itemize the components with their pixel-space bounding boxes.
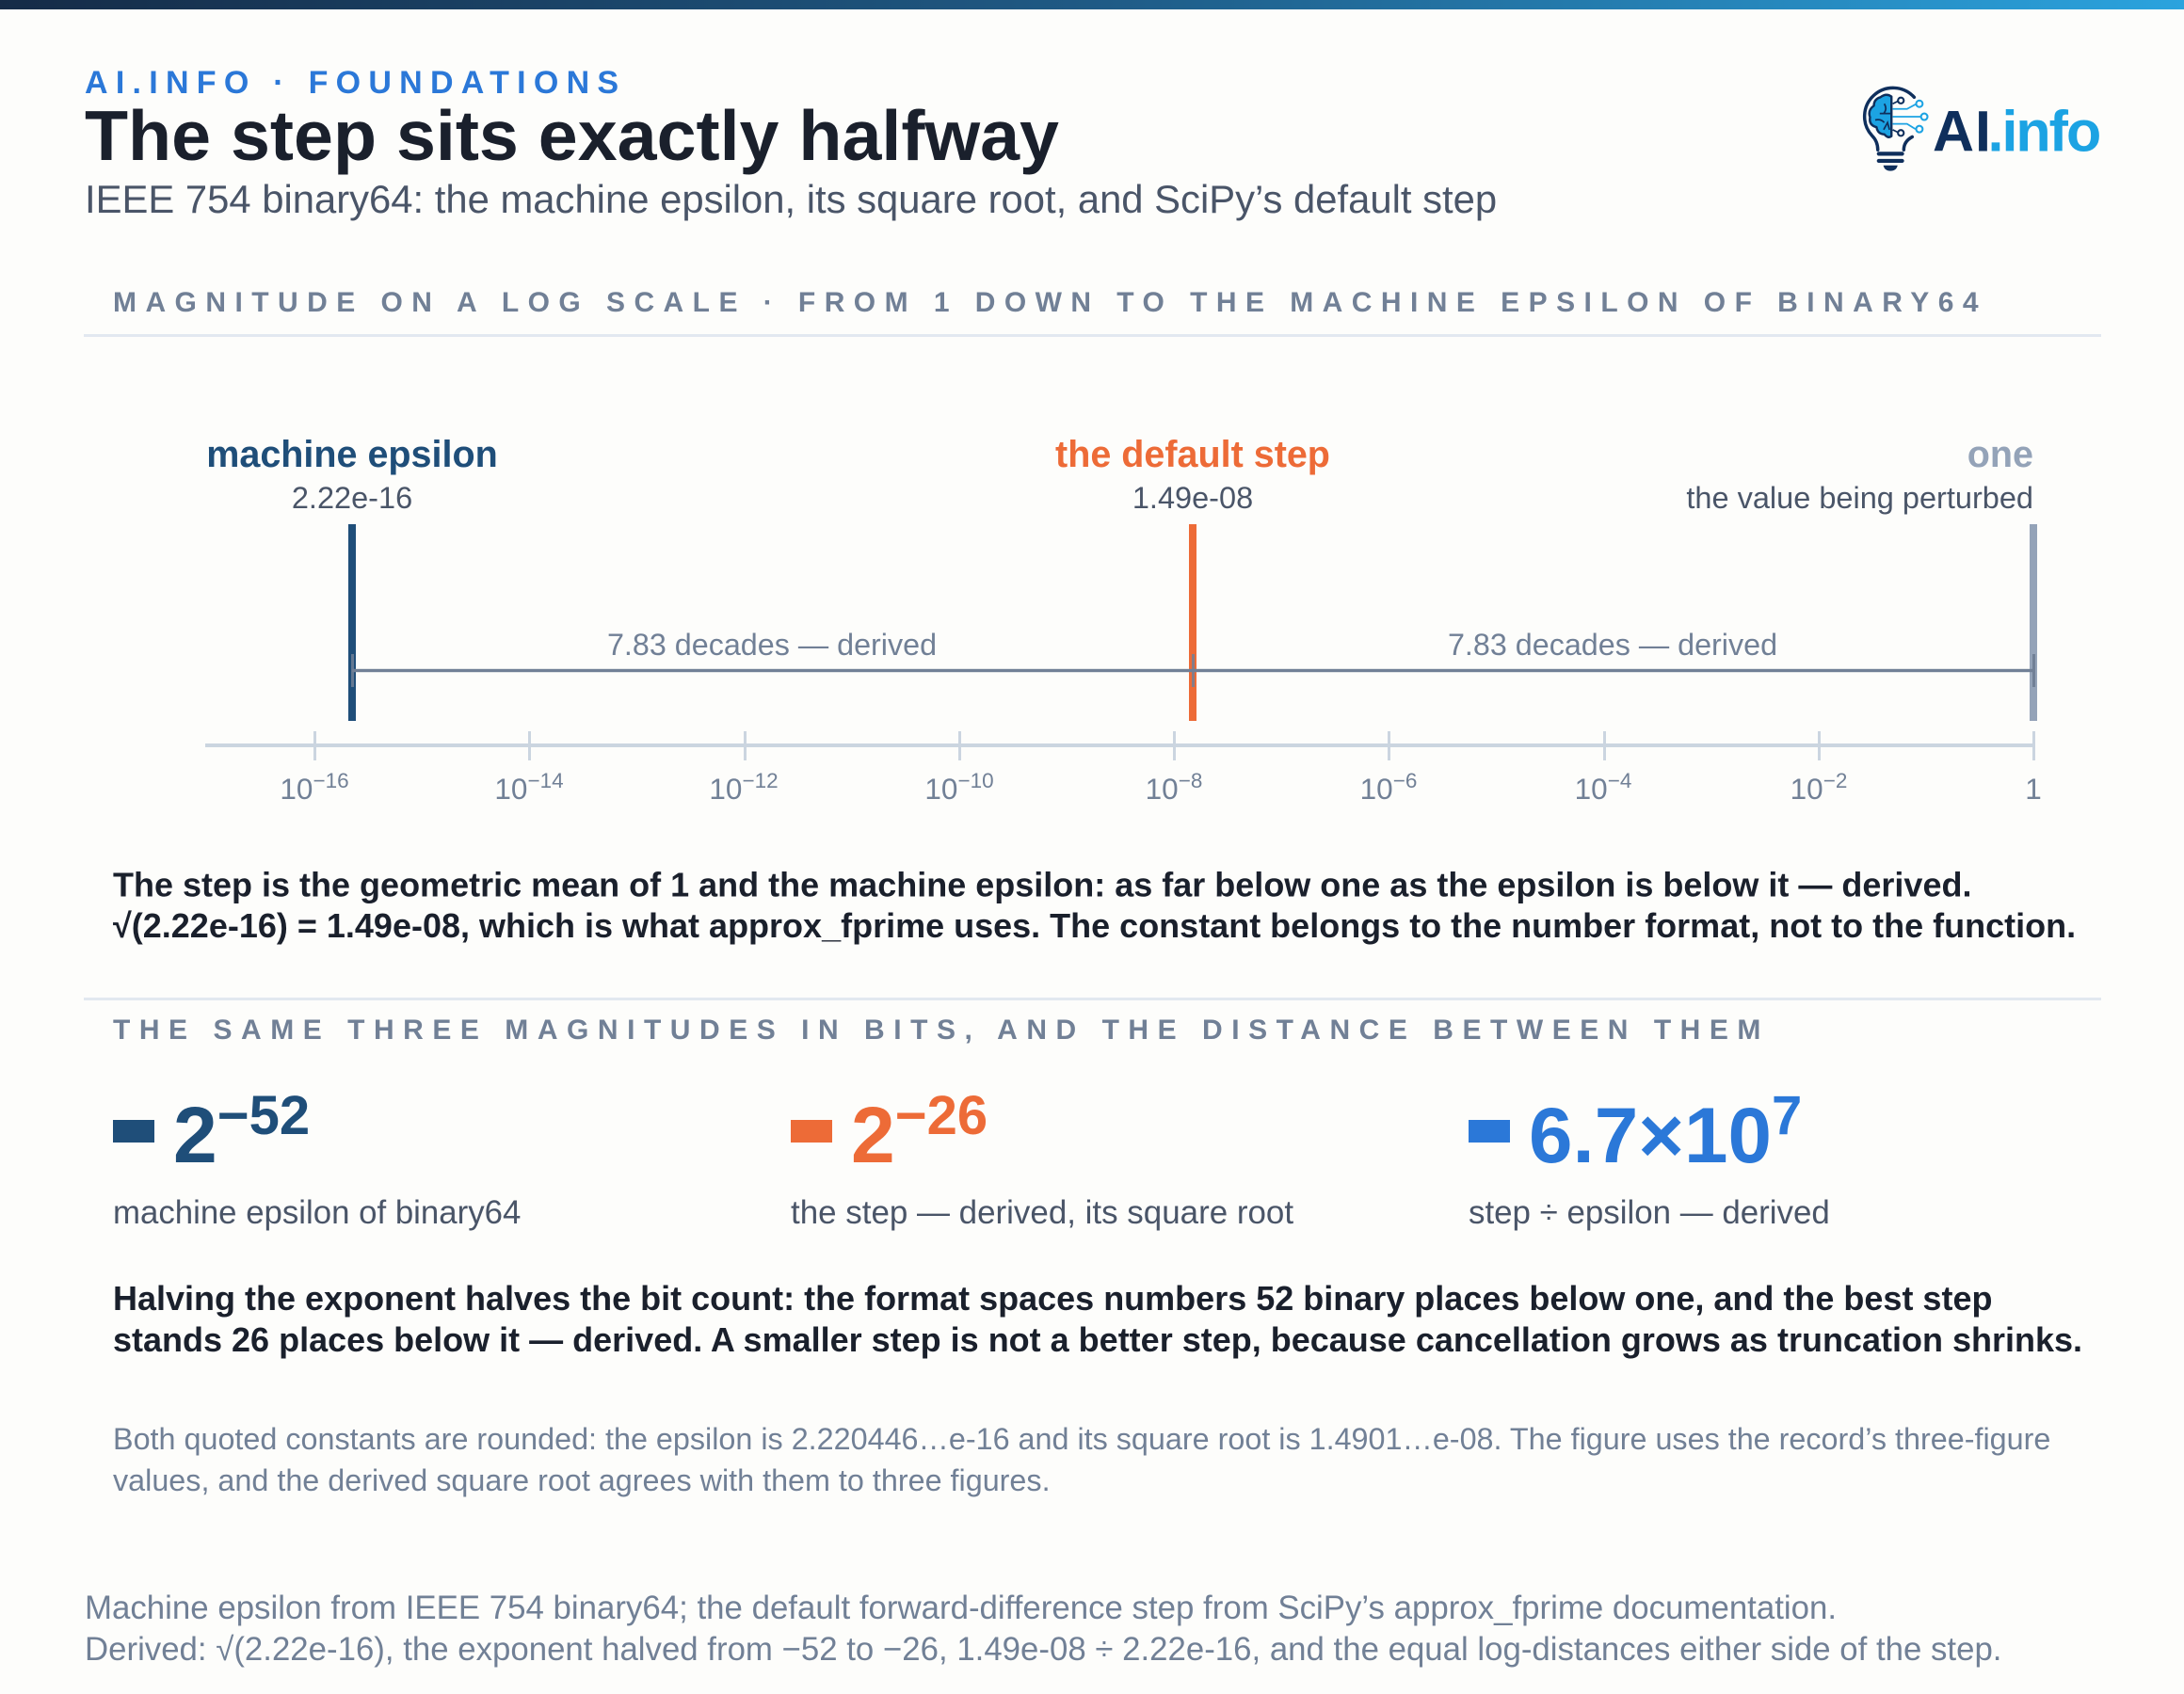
source footer: Derived: √(2.22e-16), the exponent halved from −52 to −26, 1.49e-08 ÷ 2.22e-16, and the equal log-distances either side of the step. [85,1631,2001,1668]
marker: the default step: the default step [1055,434,1330,475]
axis tick labels: −2 [1823,769,1847,792]
marker: the default step [1055,434,1330,721]
marker: one: the value being perturbed [1686,481,2033,515]
stat: epsilon exponent: machine epsilon of binary64 [113,1194,521,1231]
section heading: magnitude on a log scale: MAGNITUDE ON A LOG SCALE · FROM 1 DOWN TO THE MACHINE EPSILON OF BINARY64 [113,287,1987,318]
stat: ratio [1469,1085,1830,1231]
distance bracket: 7.83 decades — derived [607,628,937,662]
axis [205,731,2035,760]
section heading: bits: THE SAME THREE MAGNITUDES IN BITS, AND THE DISTANCE BETWEEN THEM [113,1015,1770,1046]
top gradient bar [0,0,2184,9]
takeaway paragraph one: The step is the geometric mean of 1 and the machine epsilon: as far below one as the epsilon is below it — derived. [113,866,1971,903]
marker: machine epsilon: 2.22e-16 [292,481,412,515]
axis tick labels: 10 [1575,772,1608,806]
log scale chart [205,434,2042,806]
distance bracket: 7.83 decades — derived [1448,628,1777,662]
wordmark: I [1975,100,1991,164]
marker: the default step: 1.49e-08 [1132,481,1253,515]
wordmark: .info [1988,100,2099,164]
stat: step exponent [791,1085,1293,1231]
axis tick labels: −12 [742,769,779,792]
axis tick labels: −16 [313,769,349,792]
rounding note: values, and the derived square root agrees with them to three figures. [113,1463,1051,1497]
stat: step exponent: −26 [895,1085,988,1146]
axis tick labels: 10 [924,772,957,806]
marker: machine epsilon [206,434,498,721]
axis tick labels: −14 [527,769,564,792]
eyebrow: AI.INFO · FOUNDATIONS [85,65,626,101]
takeaway paragraph two: Halving the exponent halves the bit count: the format spaces numbers 52 binary places below one, and the best step [113,1279,1992,1318]
stat: step exponent: the step — derived, its square root [791,1194,1293,1231]
axis tick labels: 10 [494,772,527,806]
stat: step exponent: 2 [851,1091,895,1179]
wordmark: A [1933,100,1974,164]
axis tick labels: 10 [1146,772,1179,806]
marker: machine epsilon: machine epsilon [206,434,498,475]
source footer: Machine epsilon from IEEE 754 binary64; the default forward-difference step from SciPy’s approx_fprime documentation. [85,1590,1837,1626]
icon: light bulb with brain [1865,88,1928,171]
logo: AI.info [1865,88,2099,171]
title: The step sits exactly halfway [85,96,1059,175]
marker: one [1686,434,2037,721]
stat: epsilon exponent [113,1085,521,1231]
stat: epsilon exponent: −52 [217,1085,310,1146]
axis tick labels: 10 [1791,772,1823,806]
axis tick labels: −4 [1608,769,1631,792]
header [85,65,1497,221]
stat: ratio: 6.7×10 [1529,1091,1772,1179]
stat: ratio: 7 [1772,1085,1802,1146]
takeaway paragraph one: √(2.22e-16) = 1.49e-08, which is what approx_fprime uses. The constant belongs to the number format, not to the function. [113,906,2076,945]
axis tick labels: −6 [1393,769,1417,792]
takeaway paragraph two: stands 26 places below it — derived. A smaller step is not a better step, because cancellation grows as truncation shrinks. [113,1320,2082,1359]
axis tick labels: −10 [957,769,994,792]
stat: ratio: step ÷ epsilon — derived [1469,1194,1830,1231]
axis tick labels: 10 [1360,772,1393,806]
axis tick labels: 10 [280,772,313,806]
subtitle: IEEE 754 binary64: the machine epsilon, its square root, and SciPy’s default step [85,177,1497,221]
marker: one: one [1967,434,2033,475]
axis tick labels: 10 [709,772,742,806]
axis tick labels: −8 [1179,769,1202,792]
axis tick labels: 1 [2025,772,2042,806]
distance bracket [351,628,2035,687]
rounding note: Both quoted constants are rounded: the epsilon is 2.220446…e-16 and its square root is 1.4901…e-08. The figure uses the record’s three-figure [113,1422,2050,1456]
axis tick labels [280,769,2042,806]
stat: epsilon exponent: 2 [173,1091,217,1179]
